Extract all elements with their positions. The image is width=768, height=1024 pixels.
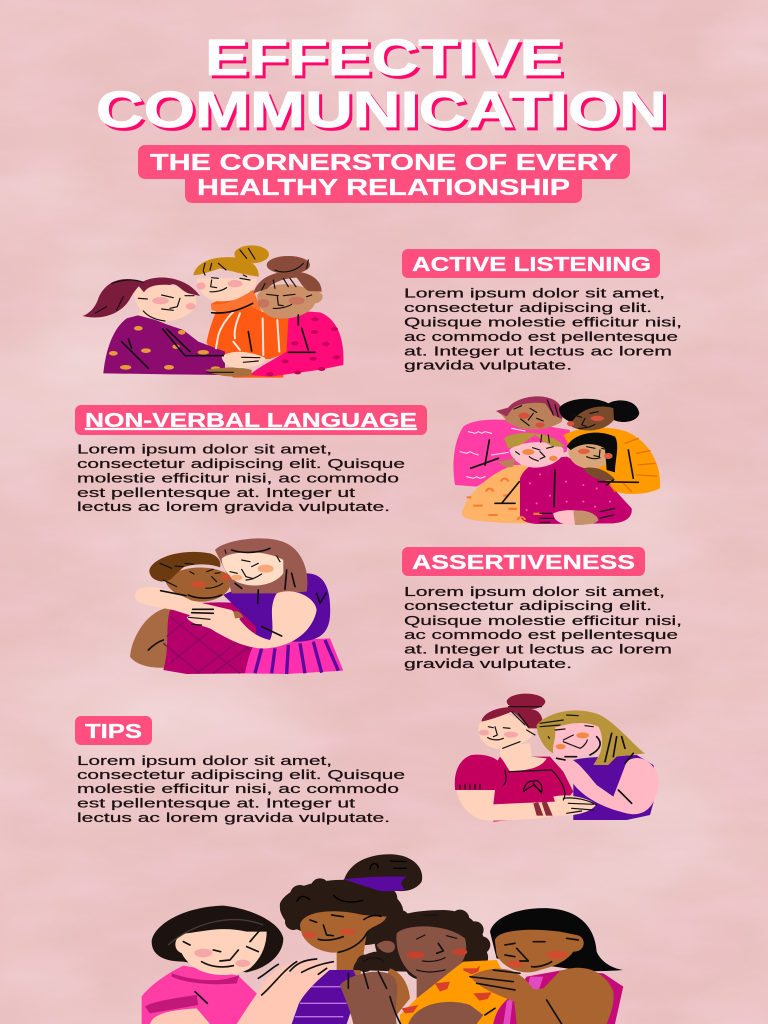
assertiveness text: consectetur adipiscing elit. <box>404 599 652 613</box>
assertiveness heading <box>402 547 645 576</box>
active listening text: consectetur adipiscing elit. <box>404 301 652 315</box>
tips text: consectetur adipiscing elit. Quisque <box>77 768 405 782</box>
illustration: couple hugging <box>130 538 343 674</box>
non-verbal language text: molestie efficitur nisi, ac commodo <box>77 472 399 486</box>
tips text: molestie efficitur nisi, ac commodo <box>77 782 399 796</box>
assertiveness heading: ASSERTIVENESS <box>412 552 635 574</box>
active listening heading: ACTIVE LISTENING <box>412 254 651 276</box>
assertiveness text: Lorem ipsum dolor sit amet, <box>404 585 665 599</box>
tips heading <box>75 716 152 745</box>
active listening text: at. Integer ut lectus ac lorem <box>404 344 672 358</box>
title <box>96 29 667 138</box>
title: EFFECTIVE <box>205 29 563 86</box>
subtitle banner: HEALTHY RELATIONSHIP <box>197 174 570 200</box>
non-verbal language text: consectetur adipiscing elit. Quisque <box>77 457 405 471</box>
illustration: four friends embracing <box>453 396 660 525</box>
non-verbal language heading <box>75 405 427 435</box>
active listening text: Quisque molestie efficitur nisi, <box>404 316 682 330</box>
tips text: lectus ac lorem gravida vulputate. <box>77 811 390 825</box>
assertiveness text: gravida vulputate. <box>404 657 572 671</box>
tips text: Lorem ipsum dolor sit amet, <box>77 754 332 768</box>
illustration: two friends leaning together <box>455 694 659 822</box>
assertiveness text: ac commodo est pellentesque <box>404 628 678 642</box>
assertiveness text: Quisque molestie efficitur nisi, <box>404 614 682 628</box>
active listening heading <box>402 249 660 278</box>
assertiveness text: at. Integer ut lectus ac lorem <box>404 642 672 656</box>
title: COMMUNICATION <box>96 81 667 138</box>
non-verbal language heading: NON-VERBAL LANGUAGE <box>85 410 417 432</box>
active listening text <box>404 286 682 372</box>
tips text <box>77 754 405 825</box>
non-verbal language text: lectus ac lorem gravida vulputate. <box>77 500 390 514</box>
illustration: three friends hugging <box>83 245 344 378</box>
illustration: group of four friends <box>142 854 623 1024</box>
subtitle banner <box>138 145 630 203</box>
non-verbal language text <box>77 442 405 514</box>
tips text: est pellentesque at. Integer ut <box>77 796 356 810</box>
active listening text: Lorem ipsum dolor sit amet, <box>404 286 665 300</box>
non-verbal language text: est pellentesque at. Integer ut <box>77 486 356 500</box>
non-verbal language text: Lorem ipsum dolor sit amet, <box>77 442 332 456</box>
active listening text: ac commodo est pellentesque <box>404 330 678 344</box>
tips heading: TIPS <box>85 721 142 743</box>
subtitle banner: THE CORNERSTONE OF EVERY <box>150 149 618 175</box>
active listening text: gravida vulputate. <box>404 358 572 372</box>
assertiveness text <box>404 585 682 671</box>
